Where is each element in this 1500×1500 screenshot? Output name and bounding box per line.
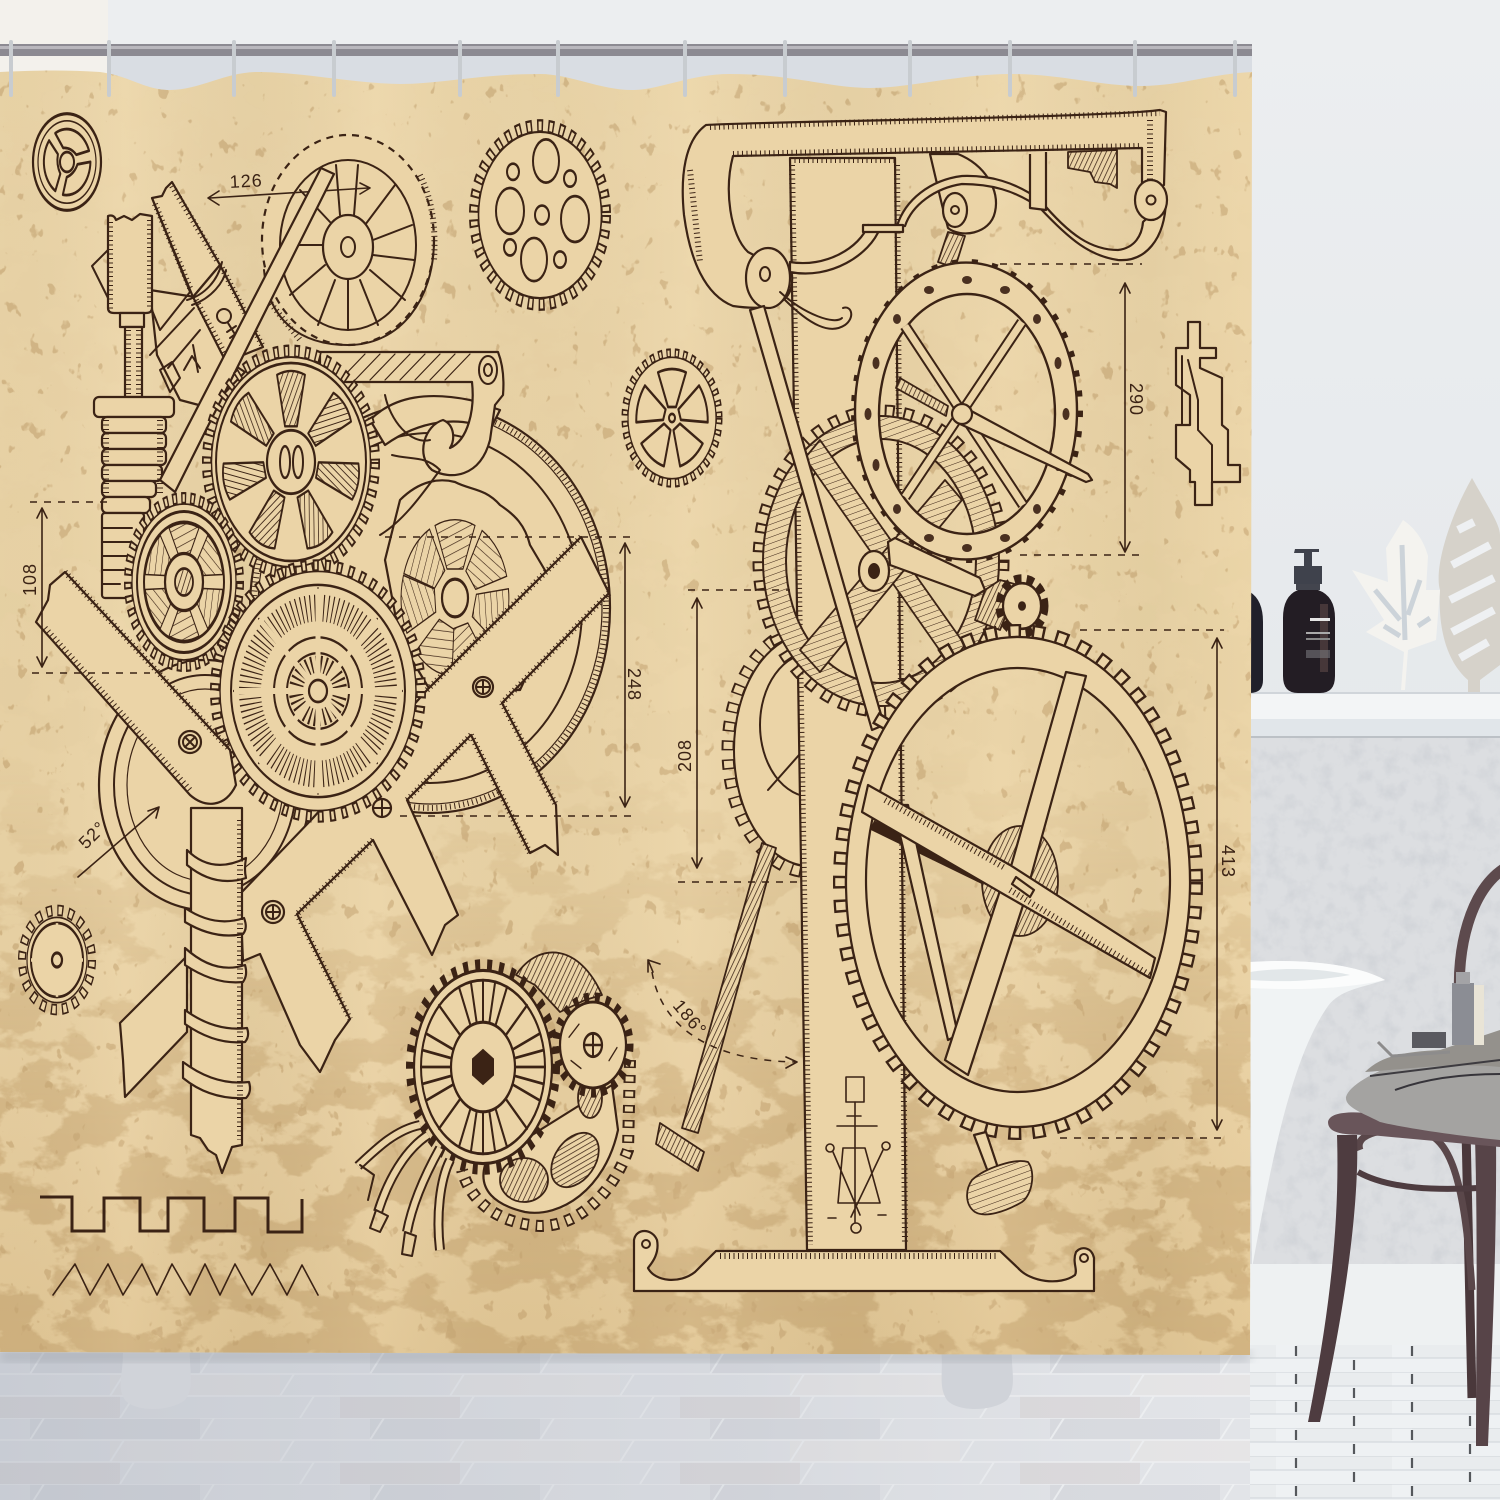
arm and hook <box>320 352 503 535</box>
panel: right mechanism drawing <box>634 110 1240 1291</box>
dimension 248: 248 <box>624 668 644 701</box>
small crank part <box>1176 322 1240 505</box>
front left leg <box>1308 1135 1357 1422</box>
decorative leaf grey <box>1439 478 1500 692</box>
dimension 208 <box>675 590 800 882</box>
diagonal tube assembly <box>120 182 263 408</box>
panel: left mechanism drawing <box>20 114 719 1295</box>
seat ring <box>1359 1130 1472 1290</box>
tiled floor <box>0 1345 1500 1500</box>
gear small spoked <box>128 498 240 666</box>
bolt on gear rim <box>373 799 391 817</box>
dimension 413: 413 <box>1218 845 1238 878</box>
bottom crescent gear <box>462 952 630 1226</box>
curtain shadow on floor <box>0 1350 1250 1362</box>
dimension 126: 126 <box>229 170 263 192</box>
base <box>634 1231 1094 1291</box>
decorative leaf white <box>1352 520 1440 690</box>
machine column <box>790 158 906 1250</box>
pendulum right <box>967 1132 1032 1214</box>
left soap bottle partly hidden <box>1250 592 1263 693</box>
alchemy symbol <box>826 1077 890 1233</box>
bottom main gear <box>410 965 556 1169</box>
dimension 290 <box>1000 264 1146 555</box>
fan gear <box>207 351 375 573</box>
saw gear <box>855 263 1092 559</box>
wall shelf <box>1250 692 1500 738</box>
lower left gear <box>728 628 892 872</box>
folded towels <box>1346 1030 1500 1140</box>
dimension 248 <box>385 537 644 816</box>
main x strap <box>240 537 609 1072</box>
upper wall shadow band <box>108 56 1252 96</box>
panel: shower curtain <box>0 60 1252 1360</box>
chair <box>1308 868 1500 1446</box>
top gear with holes <box>474 126 606 304</box>
coil spring <box>94 397 174 598</box>
big rear wheel <box>250 403 610 813</box>
rear leg <box>1466 1130 1472 1398</box>
lower left strap piece <box>120 956 187 1097</box>
top left small wheel <box>33 114 101 210</box>
dimension 108: 108 <box>20 563 40 596</box>
bolt on strap <box>473 677 493 697</box>
upper left piston <box>92 214 152 397</box>
rear gear <box>759 411 1003 711</box>
dimension 52 degrees: 52° <box>75 817 110 853</box>
dimension 186 degrees: 186° <box>669 996 711 1040</box>
seat <box>1328 1112 1500 1147</box>
lower left wheel <box>99 660 311 910</box>
large bottom gear <box>840 631 1196 1133</box>
top arm and hook <box>683 110 1167 329</box>
big wheel gear <box>215 565 421 817</box>
pinion and shaft <box>859 538 1044 632</box>
long diagonal rod <box>160 168 334 492</box>
soap bottle <box>1283 549 1335 693</box>
chair back <box>1459 868 1500 1000</box>
jar <box>1452 972 1484 1045</box>
tub foot left <box>121 1340 191 1409</box>
curtain hooks <box>11 42 1235 95</box>
wrapped vertical post <box>183 808 250 1173</box>
zigzag wave <box>53 1264 318 1295</box>
pendulum left <box>656 843 776 1171</box>
vertical rod from hook <box>750 306 884 730</box>
dimension 108 <box>20 502 150 673</box>
floor skirting <box>1250 1264 1500 1350</box>
bolt lower strap <box>262 901 284 923</box>
cables <box>358 1125 450 1256</box>
square wave <box>40 1197 302 1232</box>
bottom small gear <box>556 997 630 1093</box>
large spoked wheel <box>262 135 434 345</box>
dimension 186 degrees <box>648 960 797 1068</box>
inner rear gear <box>385 480 552 690</box>
lower textured wall <box>1250 738 1500 1268</box>
dimension 290: 290 <box>1126 383 1146 416</box>
small left gear <box>22 910 92 1010</box>
bolt left <box>179 731 201 753</box>
tiled niche top left <box>0 0 108 92</box>
bathtub <box>1250 961 1385 1268</box>
tub foot right <box>940 1340 1013 1409</box>
upper left strap <box>36 572 236 804</box>
dimension 126 <box>208 170 370 205</box>
dimension 208: 208 <box>675 739 695 772</box>
small fan gear <box>625 353 719 483</box>
upper brace behind saw gear <box>938 232 965 268</box>
curtain rod <box>0 44 1252 56</box>
dimension 52 degrees <box>75 807 159 877</box>
front right leg <box>1475 1138 1496 1446</box>
dimension 413 <box>1060 630 1238 1138</box>
